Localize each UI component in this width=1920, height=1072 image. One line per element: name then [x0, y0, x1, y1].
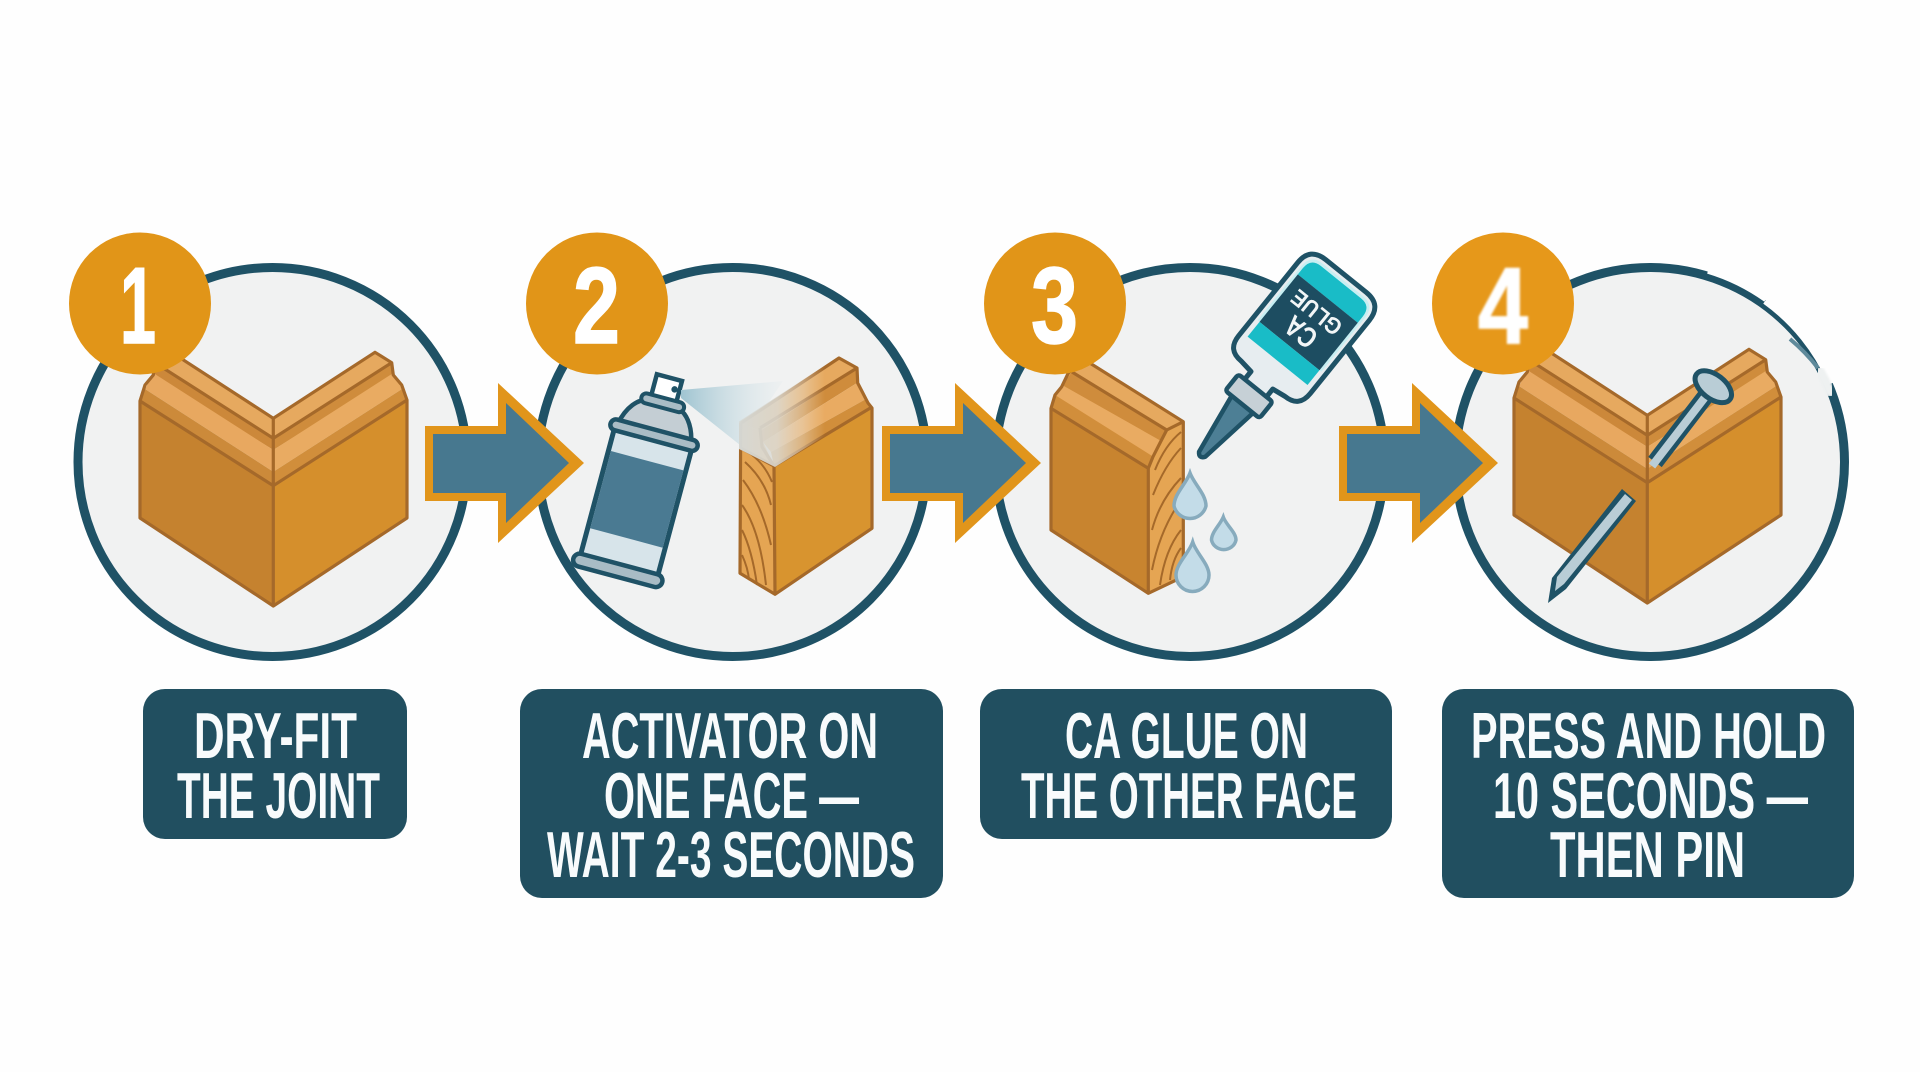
label: step 1: THE JOINT: [177, 759, 380, 832]
label: step 3: CA GLUE ON: [1065, 699, 1308, 772]
label: step 1: [143, 689, 407, 839]
badge: number 2: 2: [573, 245, 620, 367]
arrow: step 2 to 3: [882, 383, 1041, 543]
label: step 2: ACTIVATOR ON: [582, 699, 878, 772]
label: step 3: THE OTHER FACE: [1021, 759, 1357, 832]
circle: step 4: [1456, 268, 1844, 656]
badge: number 4: 4: [1478, 245, 1528, 367]
arrow: step 3 to 4: [1339, 383, 1498, 543]
circle: step 2: [538, 268, 927, 656]
label: step 1: DRY-FIT: [194, 699, 357, 772]
badge: number 1: [69, 232, 211, 374]
icon: CA glue drops: [1174, 473, 1236, 592]
icon: spray mist cone: [681, 381, 783, 445]
label: step 2: [520, 689, 943, 898]
icon: mitred wood joint step 1: [140, 352, 407, 606]
badge: number 2: [526, 232, 668, 374]
badge: number 4: [1432, 232, 1574, 374]
icon: mitred wood joint step 4: [1514, 349, 1781, 603]
badge: number 3: 3: [1031, 245, 1078, 367]
badge: number 1: 1: [120, 245, 156, 367]
label: step 4: THEN PIN: [1550, 818, 1745, 891]
circle: step 1: [78, 268, 467, 656]
label: step 2: ONE FACE —: [604, 759, 859, 832]
icon: CA glue bottle: [1165, 247, 1382, 485]
label: step 3: [980, 689, 1392, 839]
text: bottle label GLUE: GLUE: [1286, 284, 1347, 341]
label: step 4: [1442, 689, 1854, 898]
circle: step 3: [996, 268, 1384, 656]
icon: spray can: [572, 366, 714, 589]
icon: wood piece step 3: [1051, 360, 1183, 593]
badge: number 3: [984, 232, 1126, 374]
text: bottle label CA: CA: [1278, 308, 1324, 354]
icon: nail: [1548, 364, 1737, 603]
arrow: step 1 to 2: [425, 383, 584, 543]
label: step 2: WAIT 2-3 SECONDS: [547, 818, 915, 891]
icon: wood piece step 2: [739, 356, 872, 594]
